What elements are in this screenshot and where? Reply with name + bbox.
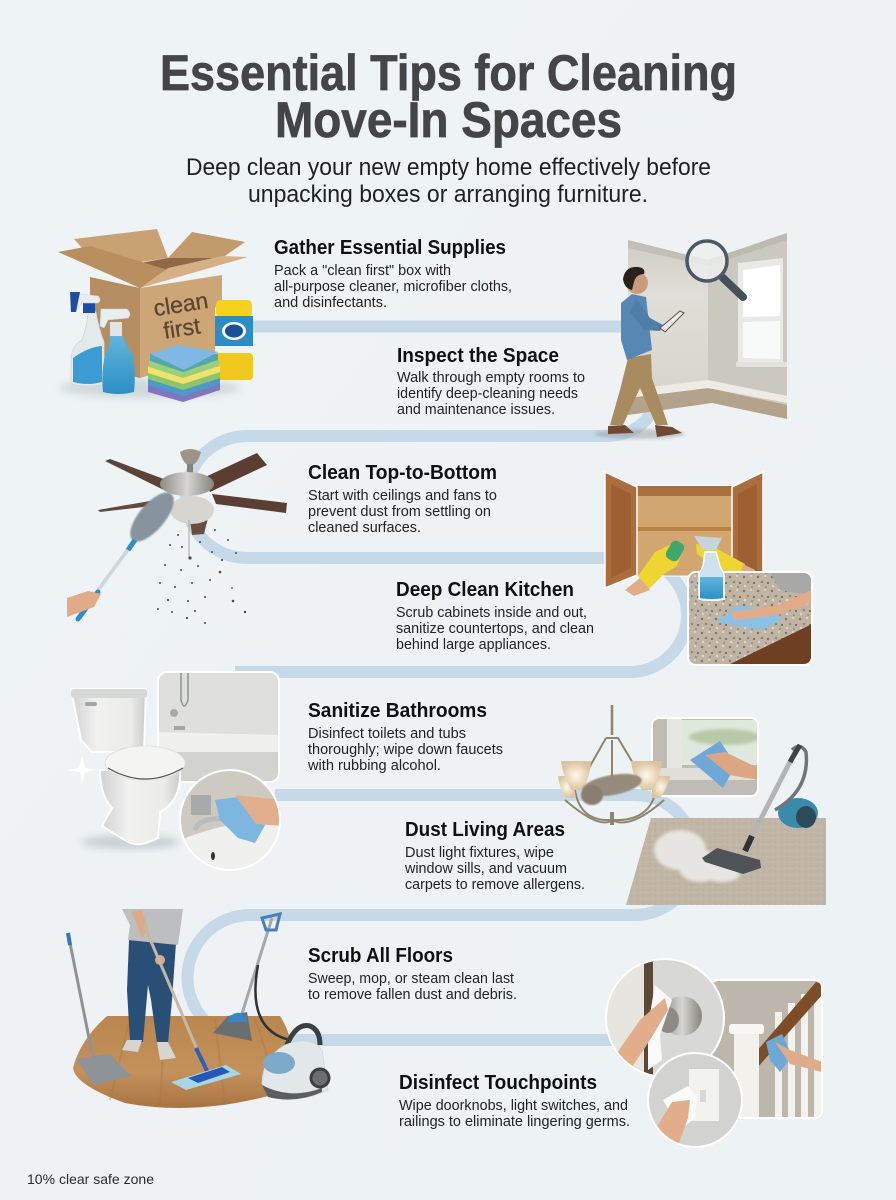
footer note: 10% clear safe zone bbox=[27, 1171, 154, 1187]
step 3: clean top-to-bottom bbox=[67, 449, 497, 624]
toilet bbox=[67, 689, 185, 849]
illustration: ceiling fan and duster bbox=[67, 449, 287, 624]
text: scrub all floors bbox=[308, 945, 517, 1003]
text: gather essential supplies: Gather Essential Supplies bbox=[274, 237, 506, 259]
box label: first bbox=[161, 312, 203, 344]
subtitle bbox=[186, 154, 711, 208]
text: deep clean kitchen: sanitize countertops, and clean bbox=[396, 621, 594, 637]
stair railing panel bbox=[711, 980, 822, 1118]
step 8: disinfect touchpoints bbox=[399, 959, 822, 1147]
subtitle: Deep clean your new empty home effectively before bbox=[186, 154, 711, 181]
window sill panel bbox=[652, 718, 761, 796]
spray bottle bbox=[694, 536, 724, 600]
spray bottle blue bbox=[100, 309, 135, 394]
text: deep clean kitchen: behind large appliances. bbox=[396, 637, 551, 653]
step 1: gather essential supplies bbox=[58, 229, 512, 402]
carpet bbox=[626, 818, 826, 905]
text: gather essential supplies: Pack a "clean first" box with bbox=[274, 263, 451, 279]
doorknob circle bbox=[606, 959, 724, 1077]
text: clean top-to-bottom bbox=[308, 462, 497, 536]
duster bbox=[123, 486, 181, 548]
text: dust living areas: Dust Living Areas bbox=[405, 819, 565, 841]
mop bbox=[144, 925, 241, 1090]
title bbox=[160, 45, 737, 148]
stack of cloths bbox=[148, 345, 220, 402]
step 4: deep clean kitchen bbox=[396, 472, 812, 665]
text: inspect the space: and maintenance issues. bbox=[397, 402, 555, 418]
broom bbox=[213, 914, 280, 1041]
text: dust living areas bbox=[404, 819, 585, 893]
spray bottle white bbox=[70, 292, 104, 386]
text: clean top-to-bottom: Clean Top-to-Bottom bbox=[308, 462, 497, 484]
text: inspect the space: Inspect the Space bbox=[397, 345, 559, 367]
text: inspect the space bbox=[397, 345, 585, 418]
countertop bbox=[688, 572, 812, 665]
illustration: mopping floor bbox=[68, 909, 329, 1108]
text: clean top-to-bottom: prevent dust from settling on bbox=[308, 504, 491, 520]
text: deep clean kitchen: Deep Clean Kitchen bbox=[396, 579, 574, 601]
title: Essential Tips for Cleaning bbox=[160, 45, 737, 101]
text: disinfect touchpoints: Disinfect Touchpoints bbox=[399, 1072, 597, 1094]
text: deep clean kitchen bbox=[396, 579, 594, 653]
box label bbox=[152, 287, 210, 344]
vacuum bbox=[702, 745, 818, 874]
wipes canister bbox=[215, 300, 253, 380]
steam cleaner bbox=[255, 965, 329, 1100]
connector path bbox=[186, 326, 695, 1040]
text: clean top-to-bottom: Start with ceilings and fans to bbox=[308, 488, 497, 504]
step 6: dust living areas bbox=[404, 705, 826, 905]
text: sanitize bathrooms: with rubbing alcohol. bbox=[307, 758, 441, 774]
person bbox=[122, 909, 183, 1060]
text: inspect the space: identify deep-cleaning needs bbox=[397, 386, 578, 402]
text: disinfect touchpoints: Wipe doorknobs, light switches, and bbox=[399, 1098, 628, 1114]
wood floor bbox=[73, 1016, 302, 1108]
illustration: chandelier, window sill and vacuum bbox=[558, 705, 826, 905]
text: sanitize bathrooms: thoroughly; wipe down faucets bbox=[308, 742, 503, 758]
text: disinfect touchpoints bbox=[399, 1072, 630, 1130]
text: scrub all floors: Sweep, mop, or steam clean last bbox=[308, 971, 514, 987]
text: sanitize bathrooms: Disinfect toilets and tubs bbox=[308, 726, 466, 742]
magnifier bbox=[687, 241, 743, 297]
text: gather essential supplies: all-purpose cleaner, microfiber cloths, bbox=[274, 279, 512, 295]
chandelier bbox=[558, 705, 670, 825]
box label: clean bbox=[152, 287, 210, 321]
illustration: doorknob, switch and railing bbox=[606, 959, 822, 1147]
step 5: sanitize bathrooms bbox=[67, 672, 503, 870]
subtitle: unpacking boxes or arranging furniture. bbox=[248, 181, 648, 208]
text: scrub all floors: to remove fallen dust and debris. bbox=[308, 987, 517, 1003]
text: gather essential supplies bbox=[274, 237, 512, 311]
switch circle bbox=[648, 1053, 742, 1147]
text: dust living areas: window sills, and vacuum bbox=[404, 861, 567, 877]
dust cloud bbox=[654, 830, 740, 882]
step 7: scrub all floors bbox=[68, 909, 517, 1108]
text: disinfect touchpoints: railings to eliminate lingering germs. bbox=[399, 1114, 630, 1130]
dust particles bbox=[157, 529, 246, 624]
text: sanitize bathrooms bbox=[307, 700, 503, 774]
bathtub panel bbox=[158, 672, 279, 782]
man bbox=[595, 267, 685, 439]
text: deep clean kitchen: Scrub cabinets inside and out, bbox=[396, 605, 587, 621]
yellow gloves bbox=[638, 544, 682, 590]
step 2: inspect the space bbox=[397, 233, 787, 439]
illustration: box of supplies bbox=[58, 229, 253, 402]
text: dust living areas: Dust light fixtures, wipe bbox=[405, 845, 554, 861]
illustration: cabinet and countertop bbox=[605, 472, 812, 665]
faucet circle bbox=[180, 770, 282, 870]
illustration: man inspecting room bbox=[595, 233, 787, 439]
illustration: toilet, tub and faucet bbox=[67, 672, 282, 870]
text: clean top-to-bottom: cleaned surfaces. bbox=[308, 520, 421, 536]
text: sanitize bathrooms: Sanitize Bathrooms bbox=[308, 700, 487, 722]
dustpan and broom pole bbox=[68, 933, 131, 1085]
text: dust living areas: carpets to remove allergens. bbox=[405, 877, 585, 893]
title: Move-In Spaces bbox=[275, 92, 622, 148]
text: gather essential supplies: and disinfectants. bbox=[274, 295, 387, 311]
text: inspect the space: Walk through empty rooms to bbox=[397, 370, 585, 386]
text: scrub all floors: Scrub All Floors bbox=[308, 945, 453, 967]
